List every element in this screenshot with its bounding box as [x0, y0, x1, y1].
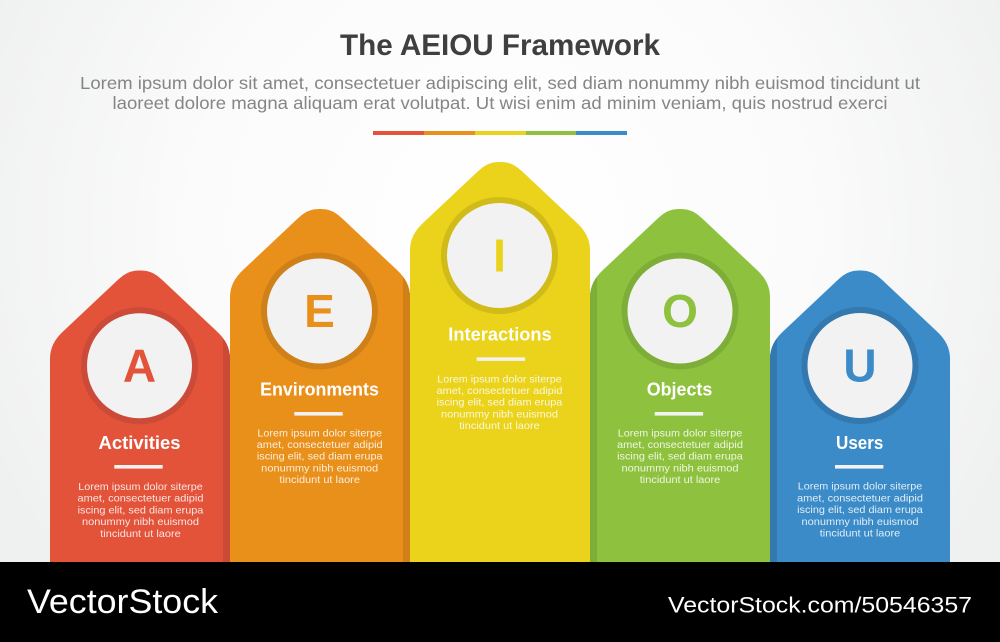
body text A — [78, 481, 204, 540]
arrow card I — [410, 162, 590, 562]
body text E: tincidunt ut laore — [279, 474, 360, 486]
card side shade O — [590, 276, 597, 562]
underline E — [294, 412, 343, 416]
card side shade U — [770, 338, 777, 562]
icon circle E — [261, 252, 378, 370]
body text I: Lorem ipsum dolor siterpe — [437, 373, 562, 385]
body text E: iscing elit, sed diam erupa — [257, 451, 383, 463]
body text E: amet, consectetuer adipid — [257, 439, 383, 451]
body text U — [797, 481, 923, 540]
arrow card E — [230, 209, 410, 562]
icon circle U: U — [843, 340, 877, 392]
heading Users: Users — [836, 432, 883, 453]
body text O: Lorem ipsum dolor siterpe — [618, 427, 742, 439]
body text I: nonummy nibh euismod — [441, 408, 558, 420]
body text U: amet, consectetuer adipid — [797, 492, 923, 504]
arrow card O — [590, 209, 770, 562]
icon circle O: O — [662, 285, 698, 337]
heading Environments: Environments — [260, 379, 379, 400]
icon circle I: I — [493, 230, 506, 282]
panel: Interactions — [410, 162, 590, 562]
heading Activities: Activities — [98, 432, 180, 453]
arrow card U — [770, 270, 950, 562]
card side shade E — [403, 276, 410, 562]
underline I — [477, 357, 525, 361]
body text O: iscing elit, sed diam erupa — [617, 451, 743, 463]
panel: Objects — [590, 209, 770, 562]
footer logo text: VectorStock — [27, 583, 219, 621]
subtitle text: laoreet dolore magna aliquam erat volutpat. Ut wisi enim ad minim veniam, quis nostrud exerci — [112, 93, 888, 113]
subtitle text: Lorem ipsum dolor sit amet, consectetuer adipiscing elit, sed diam nonummy nibh euismod tincidunt ut — [80, 73, 920, 93]
body text O: nonummy nibh euismod — [622, 462, 739, 474]
body text U: iscing elit, sed diam erupa — [797, 504, 923, 516]
subtitle text — [80, 73, 920, 113]
body text A: iscing elit, sed diam erupa — [78, 504, 204, 516]
underline O — [655, 412, 703, 416]
heading Interactions: Interactions — [448, 324, 552, 345]
body text A: Lorem ipsum dolor siterpe — [78, 481, 203, 493]
panel: Users — [770, 270, 950, 562]
body text I — [436, 373, 563, 432]
body text U: nonummy nibh euismod — [802, 516, 919, 528]
icon circle O — [622, 252, 738, 370]
body text I: tincidunt ut laore — [459, 420, 540, 432]
panel: Environments — [230, 209, 410, 562]
footer bar — [0, 562, 1000, 642]
icon circle A — [81, 307, 198, 424]
body text A: nonummy nibh euismod — [82, 516, 199, 528]
body text O: amet, consectetuer adipid — [617, 439, 743, 451]
footer image id: VectorStock.com/50546357 — [668, 592, 972, 618]
body text A: amet, consectetuer adipid — [78, 493, 204, 505]
body text O: tincidunt ut laore — [640, 474, 720, 486]
card side shade A — [223, 338, 230, 562]
body text E: Lorem ipsum dolor siterpe — [257, 427, 382, 439]
panel: Activities — [50, 270, 230, 562]
body text E — [257, 427, 383, 486]
body text E: nonummy nibh euismod — [261, 462, 378, 474]
icon circle U — [802, 307, 918, 424]
heading Objects: Objects — [647, 379, 712, 400]
body text I: amet, consectetuer adipid — [436, 385, 563, 397]
icon circle E: E — [304, 285, 335, 337]
body text U: tincidunt ut laore — [820, 528, 900, 540]
body text U: Lorem ipsum dolor siterpe — [798, 481, 922, 493]
body text I: iscing elit, sed diam erupa — [437, 397, 563, 409]
arrow card A — [50, 270, 230, 562]
body text A: tincidunt ut laore — [100, 528, 181, 540]
underline A — [114, 465, 163, 469]
body text O — [617, 427, 743, 486]
icon circle I — [441, 197, 558, 314]
icon circle A: A — [123, 340, 156, 392]
title: The AEIOU Framework — [340, 29, 660, 62]
rainbow divider — [373, 131, 627, 135]
underline U — [835, 465, 883, 469]
